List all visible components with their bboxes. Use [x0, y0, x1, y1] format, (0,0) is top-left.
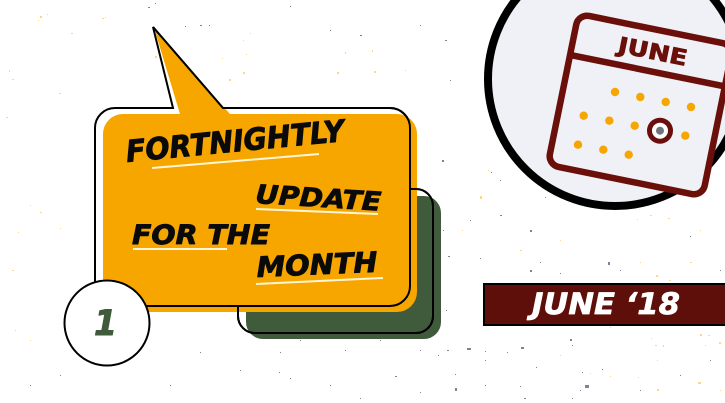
icon: calendar in circle: [488, 0, 725, 206]
banner text: JUNE ‘18: [527, 287, 680, 321]
bubble outline: [95, 27, 410, 306]
heading: MONTH: MONTH: [256, 246, 378, 284]
calendar month label: JUNE: [613, 33, 689, 72]
badge number: 1: [94, 304, 117, 344]
date banner: [484, 284, 725, 325]
calendar highlighted day: [650, 120, 670, 141]
heading: UPDATE: UPDATE: [255, 180, 382, 218]
green back panel: [246, 196, 441, 339]
heading: FORTNIGHTLY: FORTNIGHTLY: [124, 114, 349, 170]
bubble outline overlay: [130, 27, 410, 306]
bubble orange fill: [103, 31, 417, 312]
heading: FOR THE: FOR THE: [132, 220, 271, 251]
number badge: [64, 280, 150, 366]
speech bubble: [95, 27, 417, 312]
green panel outline visible on orange edge: [238, 189, 433, 333]
calendar page: [548, 14, 725, 196]
green panel outline: [238, 189, 433, 333]
calendar backdrop circle: [488, 0, 725, 206]
calendar day dots: [574, 88, 695, 159]
